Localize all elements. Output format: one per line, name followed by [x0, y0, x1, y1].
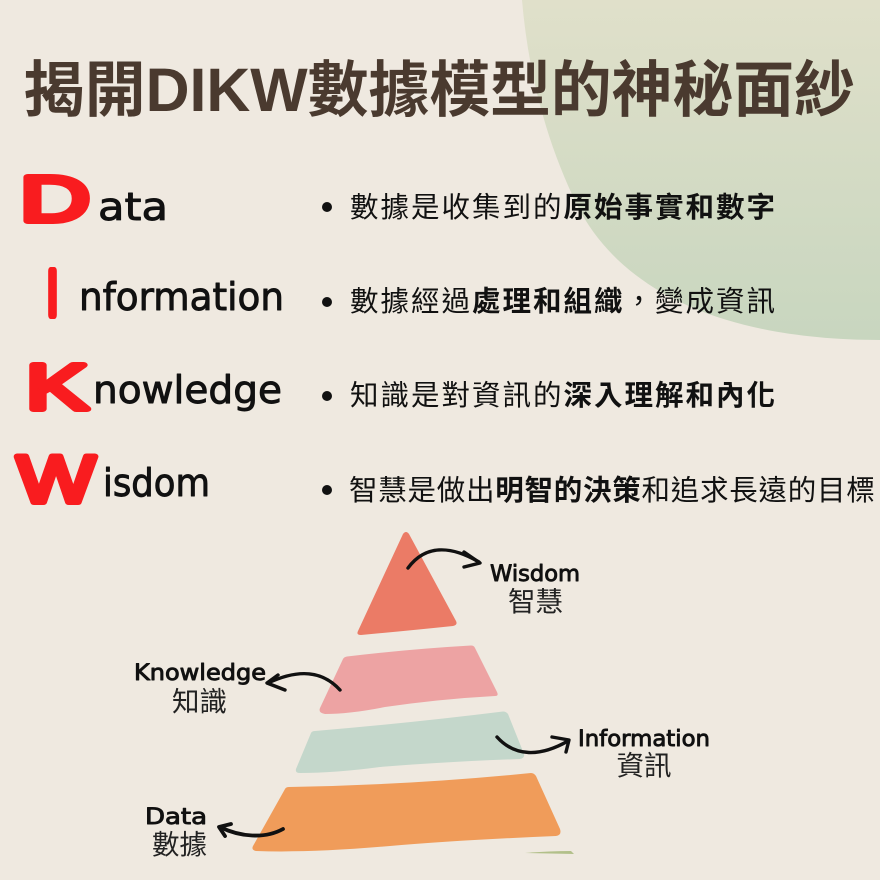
- label: wisdom: [490, 562, 580, 617]
- Knowledge word: [26, 351, 282, 423]
- layer: knowledge: [320, 646, 498, 714]
- panel: DIKW acronym: [17, 163, 284, 516]
- Wisdom word: [17, 442, 210, 516]
- Information word: [47, 257, 284, 329]
- pyramid chart: [252, 532, 574, 854]
- label: knowledge: Knowledge: [134, 661, 266, 686]
- label: data: Data: [145, 805, 207, 830]
- arrow: wisdom: [408, 550, 480, 568]
- Information word: nformation: [79, 275, 284, 319]
- arrow: knowledge: [267, 674, 340, 690]
- panel: definitions: [322, 192, 876, 507]
- Wisdom word: isdom: [103, 461, 210, 505]
- Data word: [20, 163, 168, 235]
- Knowledge word: K: [26, 351, 88, 423]
- label: wisdom: Wisdom: [490, 562, 580, 587]
- arrow: data: [219, 824, 283, 836]
- Data word: ata: [98, 185, 168, 229]
- green sliver: [525, 851, 574, 854]
- label: data: [145, 805, 207, 860]
- label: knowledge: 知識: [172, 686, 227, 717]
- layer: data: [252, 773, 560, 851]
- label: wisdom: 智慧: [508, 586, 563, 617]
- label: information: [578, 727, 710, 781]
- label: information: 資訊: [616, 750, 672, 781]
- layer: information: [296, 712, 524, 773]
- Wisdom word: W: [17, 442, 96, 516]
- definition: wisdom: 智慧是做出明智的決策和追求長遠的目標: [349, 475, 876, 507]
- definition: data: 數據是收集到的原始事實和數字: [350, 192, 777, 224]
- definition: information: 數據經過處理和組織，變成資訊: [350, 286, 777, 318]
- label: information: Information: [578, 727, 710, 752]
- definition: knowledge: 知識是對資訊的深入理解和內化: [350, 380, 777, 412]
- label: knowledge: [134, 661, 266, 717]
- Information word: I: [47, 257, 58, 329]
- layer: wisdom: [357, 532, 457, 635]
- label: data: 數據: [152, 829, 207, 860]
- arrow: information: [497, 737, 569, 753]
- background blob: [522, 0, 880, 340]
- Knowledge word: nowledge: [93, 368, 282, 412]
- Data word: D: [20, 163, 90, 235]
- title: 揭開DIKW數據模型的神秘面紗: [24, 56, 855, 124]
